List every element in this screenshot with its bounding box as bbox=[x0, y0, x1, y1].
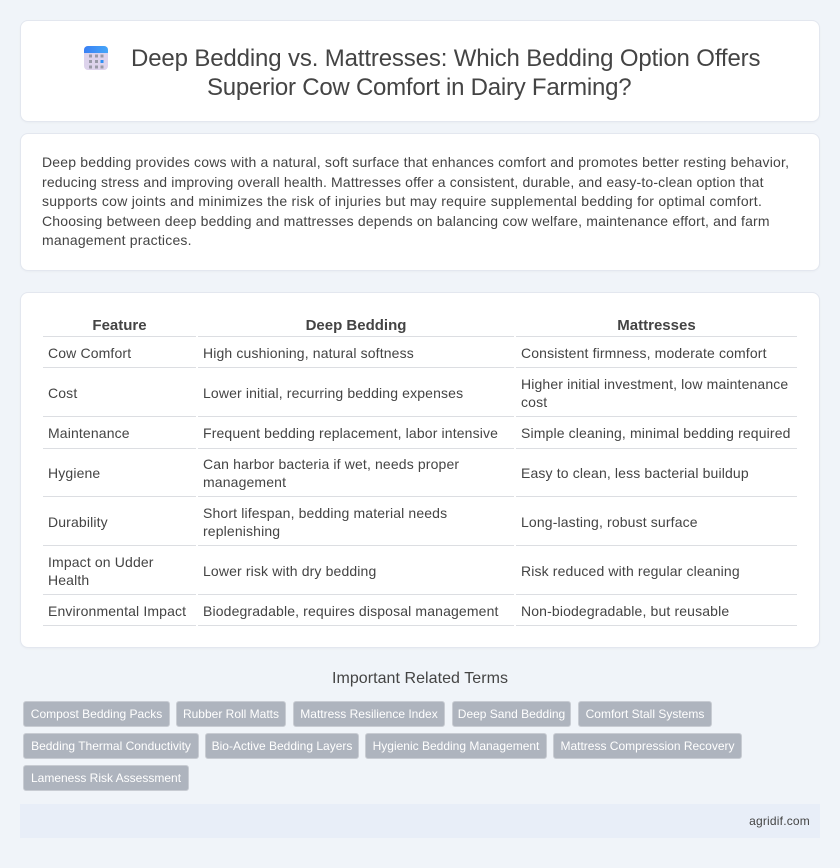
row: cost: Higher initial investment, low maintenance bbox=[521, 376, 788, 392]
row: environmental impact bbox=[48, 603, 729, 619]
row: maintenance bbox=[48, 425, 791, 441]
tag bbox=[23, 701, 170, 727]
intro text: Choosing between deep bedding and mattresses depends on balancing cow welfare, maintenance effort, and farm bbox=[42, 213, 770, 229]
row: cost: cost bbox=[521, 394, 547, 410]
row: cow comfort: High cushioning, natural softness bbox=[203, 345, 414, 361]
row: durability: replenishing bbox=[203, 523, 280, 539]
row: cost: Cost bbox=[48, 385, 77, 401]
row: durability bbox=[48, 505, 698, 539]
row: hygiene: management bbox=[203, 474, 286, 490]
row: maintenance: Frequent bedding replacement, labor intensive bbox=[203, 425, 498, 441]
table header: deep bedding: Deep Bedding bbox=[306, 317, 406, 334]
tag: Mattress Resilience Index bbox=[300, 707, 438, 721]
tag bbox=[578, 701, 712, 727]
row: impact on udder health: Lower risk with dry bedding bbox=[203, 563, 376, 579]
tag bbox=[365, 733, 547, 759]
row: hygiene bbox=[48, 456, 749, 490]
row: hygiene: Hygiene bbox=[48, 465, 100, 481]
intro text bbox=[42, 154, 789, 248]
row: environmental impact: Environmental Impact bbox=[48, 603, 186, 619]
tag: Bedding Thermal Conductivity bbox=[31, 739, 191, 753]
panel: title card bbox=[20, 20, 820, 122]
tag: Mattress Compression Recovery bbox=[560, 739, 735, 753]
row: environmental impact: Biodegradable, requires disposal management bbox=[203, 603, 499, 619]
table header: mattresses: Mattresses bbox=[617, 317, 696, 334]
row: durability: Short lifespan, bedding material needs bbox=[203, 505, 447, 521]
tag: Bio-Active Bedding Layers bbox=[212, 739, 352, 753]
row: cow comfort: Consistent firmness, moderate comfort bbox=[521, 345, 767, 361]
title: Deep Bedding vs. Mattresses: Which Bedding Option Offers bbox=[131, 45, 760, 72]
footer bar bbox=[20, 804, 820, 838]
comparison table bbox=[43, 336, 797, 626]
tag bbox=[176, 701, 286, 727]
panel: comparison table bbox=[20, 292, 820, 648]
intro text: Deep bedding provides cows with a natural, soft surface that enhances comfort and promotes better resting behavior, bbox=[42, 154, 789, 170]
row: hygiene: Can harbor bacteria if wet, needs proper bbox=[203, 456, 459, 472]
related terms tags bbox=[23, 701, 742, 791]
row: cow comfort bbox=[48, 345, 767, 361]
tag bbox=[23, 765, 189, 791]
tag bbox=[205, 733, 359, 759]
row: impact on udder health: Health bbox=[48, 572, 89, 588]
tag: Deep Sand Bedding bbox=[458, 707, 565, 721]
row: cost: Lower initial, recurring bedding expenses bbox=[203, 385, 463, 401]
row: environmental impact: Non-biodegradable, but reusable bbox=[521, 603, 729, 619]
tag: Rubber Roll Matts bbox=[183, 707, 279, 721]
row: maintenance: Simple cleaning, minimal bedding required bbox=[521, 425, 791, 441]
tag: Hygienic Bedding Management bbox=[373, 739, 539, 753]
intro text: reducing stress and improving overall health. Mattresses offer a consistent, durable, and easy-to-clean option that bbox=[42, 174, 764, 190]
row: cost bbox=[48, 376, 788, 410]
intro text: management practices. bbox=[42, 232, 192, 248]
tag bbox=[293, 701, 445, 727]
row: maintenance: Maintenance bbox=[48, 425, 130, 441]
intro text: supports cow joints and minimizes the risk of injuries but may require supplemental bedding for optimal comfort. bbox=[42, 193, 762, 209]
table header: feature: Feature bbox=[92, 317, 147, 334]
row: hygiene: Easy to clean, less bacterial buildup bbox=[521, 465, 749, 481]
tag bbox=[23, 733, 199, 759]
tag: Compost Bedding Packs bbox=[31, 707, 162, 721]
title: Superior Cow Comfort in Dairy Farming? bbox=[207, 74, 631, 101]
tag: Lameness Risk Assessment bbox=[31, 771, 181, 785]
icon: calendar bbox=[84, 46, 108, 70]
row: impact on udder health bbox=[48, 554, 740, 588]
heading: related terms: Important Related Terms bbox=[332, 670, 508, 687]
tag bbox=[553, 733, 742, 759]
footer source text: agridif.com bbox=[749, 814, 810, 828]
tag bbox=[452, 701, 571, 727]
title bbox=[131, 45, 760, 101]
row: durability: Durability bbox=[48, 514, 108, 530]
panel: introduction bbox=[20, 133, 820, 271]
row: durability: Long-lasting, robust surface bbox=[521, 514, 698, 530]
tag: Comfort Stall Systems bbox=[586, 707, 704, 721]
row: impact on udder health: Impact on Udder bbox=[48, 554, 154, 570]
row: cow comfort: Cow Comfort bbox=[48, 345, 131, 361]
row: impact on udder health: Risk reduced with regular cleaning bbox=[521, 563, 740, 579]
